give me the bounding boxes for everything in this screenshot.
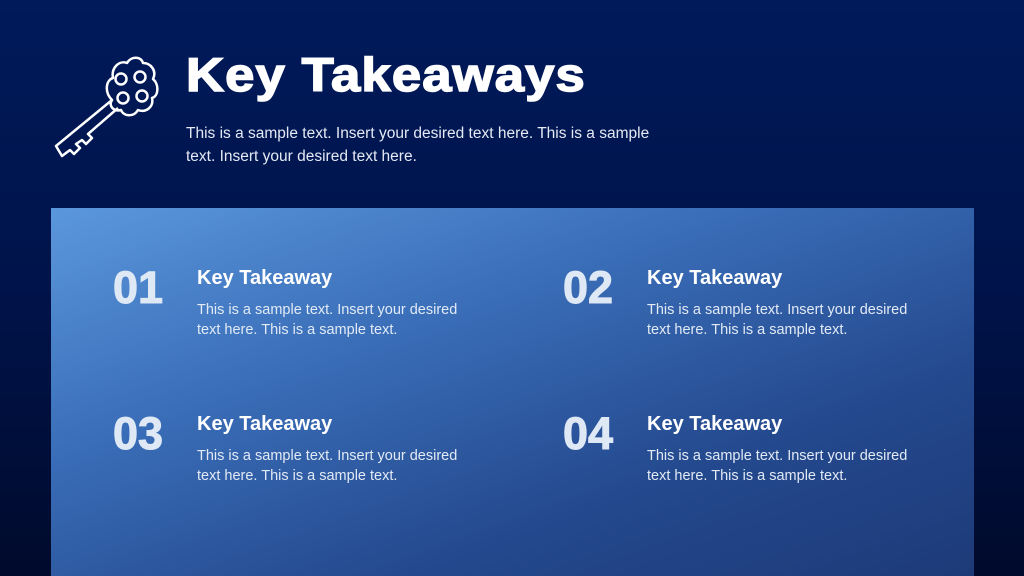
takeaway 03: 03	[113, 408, 163, 459]
takeaway 01: Key Takeaway	[197, 267, 332, 289]
takeaway 01	[113, 262, 457, 338]
takeaway 01: This is a sample text. Insert your desired text here. This is a sample text.	[197, 302, 457, 338]
panel: takeaways	[51, 208, 974, 576]
takeaway 04: Key Takeaway	[647, 413, 782, 435]
takeaway 04: This is a sample text. Insert your desired text here. This is a sample text.	[647, 448, 907, 484]
takeaway 02: 02	[563, 262, 613, 313]
takeaway 03: This is a sample text. Insert your desired text here. This is a sample text.	[197, 448, 457, 484]
takeaway 04	[563, 408, 907, 484]
takeaway 01: 01	[113, 262, 163, 313]
takeaway 02	[563, 262, 907, 338]
subtitle text: This is a sample text. Insert your desired text here. This is a sample text. Insert your desired text here.	[186, 125, 649, 165]
takeaway 04: 04	[563, 408, 613, 459]
takeaway 03	[113, 408, 457, 484]
takeaway 02: Key Takeaway	[647, 267, 782, 289]
icon: key	[54, 56, 159, 158]
takeaway 02: This is a sample text. Insert your desired text here. This is a sample text.	[647, 302, 907, 338]
title: Key Takeaways	[186, 48, 586, 101]
takeaway 03: Key Takeaway	[197, 413, 332, 435]
